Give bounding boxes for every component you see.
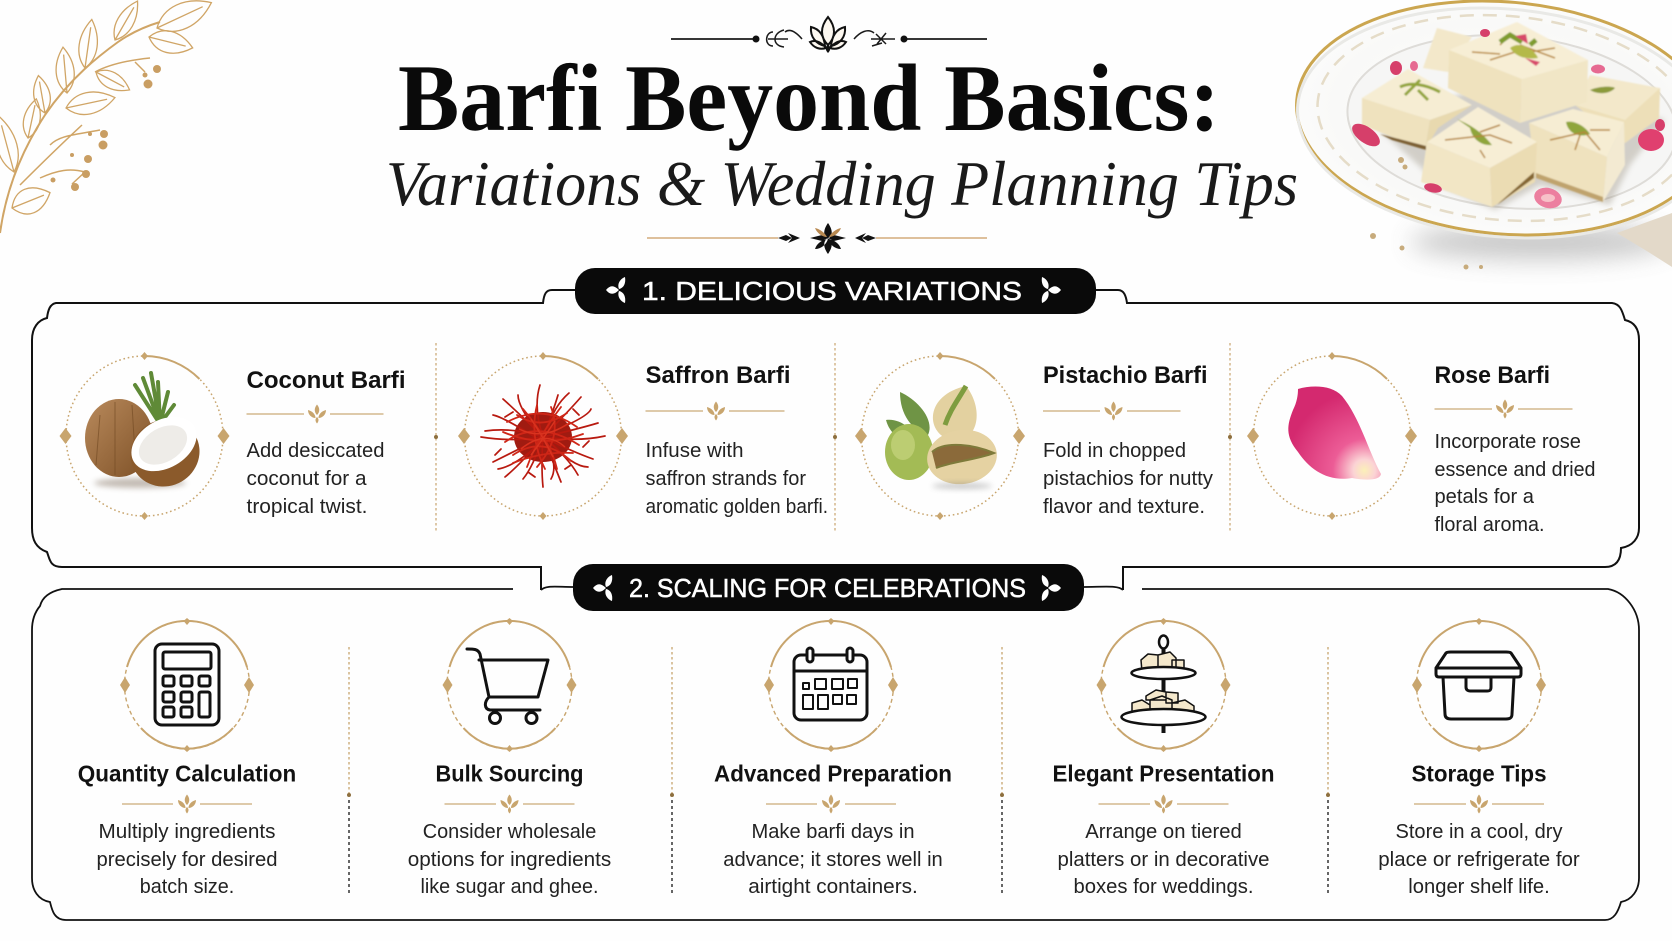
- description: like sugar and ghee.: [420, 875, 598, 898]
- description: [646, 439, 828, 518]
- napkin: [1617, 213, 1672, 267]
- lotus: [810, 17, 846, 49]
- divider: [1414, 794, 1544, 814]
- decorative gold botanical branch: [0, 0, 217, 233]
- divider: [766, 794, 896, 814]
- top title ornament: [671, 17, 987, 53]
- description: options for ingredients: [408, 848, 611, 871]
- description: platters or in decorative: [1058, 848, 1270, 871]
- item: storage tips: [1378, 618, 1580, 898]
- description: petals for a: [1434, 485, 1535, 508]
- icon: pistachios: [885, 386, 1000, 489]
- barfi pieces: [1362, 22, 1660, 207]
- heading: Bulk Sourcing: [436, 760, 584, 786]
- item: elegant presentation: [1052, 618, 1274, 898]
- description: saffron strands for: [646, 467, 806, 490]
- contact shadows: [1380, 90, 1665, 210]
- description: Store in a cool, dry: [1396, 820, 1563, 843]
- description: [1043, 439, 1214, 518]
- description: Multiply ingredients: [98, 820, 276, 843]
- left piece: [1362, 69, 1472, 120]
- heading: rose barfi: Rose Barfi: [1434, 362, 1550, 389]
- pill heading: 1. DELICIOUS VARIATIONS: [642, 278, 1022, 306]
- description: [96, 820, 278, 898]
- lower title ornament: [647, 223, 987, 254]
- rose petals: [1348, 29, 1665, 211]
- item: pistachio barfi: [855, 352, 1214, 520]
- description: [723, 820, 943, 898]
- description: Arrange on tiered: [1085, 820, 1242, 843]
- description: advance; it stores well in: [723, 848, 943, 871]
- icon: calculator: [155, 644, 219, 725]
- item: saffron barfi: [458, 352, 828, 520]
- description: coconut for a: [246, 467, 367, 490]
- icon: tiered platter: [1122, 636, 1206, 733]
- heading: Storage Tips: [1412, 760, 1546, 786]
- title: Barfi Beyond Basics:: [398, 45, 1220, 151]
- heading: pistachio barfi: Pistachio Barfi: [1043, 362, 1208, 389]
- description: floral aroma.: [1434, 513, 1544, 536]
- divider: [1434, 400, 1572, 418]
- back left piece: [1423, 28, 1472, 72]
- description: essence and dried: [1434, 458, 1596, 481]
- icon: saffron strands: [481, 385, 605, 487]
- heading: Advanced Preparation: [714, 760, 952, 786]
- pill heading: [541, 564, 1123, 611]
- crumbs: [1370, 157, 1483, 270]
- heading: Elegant Presentation: [1052, 760, 1274, 786]
- description: pistachios for nutty: [1043, 467, 1214, 490]
- divider: [246, 404, 384, 424]
- heading: coconut barfi: Coconut Barfi: [246, 367, 406, 394]
- item: coconut barfi: [60, 352, 406, 520]
- description: longer shelf life.: [1408, 875, 1550, 898]
- description: boxes for weddings.: [1074, 875, 1254, 898]
- pill heading: 2. SCALING FOR CELEBRATIONS: [629, 575, 1026, 603]
- divider: [122, 794, 252, 814]
- icon: coconut: [85, 373, 212, 499]
- plate of barfi image: [1287, 0, 1672, 270]
- description: Fold in chopped: [1043, 439, 1186, 462]
- centre piece: [1449, 22, 1588, 79]
- description: Make barfi days in: [752, 820, 914, 843]
- panel: scaling for celebrations: [32, 564, 1639, 920]
- divider: [1043, 402, 1180, 420]
- front left piece: [1427, 107, 1537, 168]
- item: advanced preparation: [714, 618, 952, 898]
- description: precisely for desired: [96, 848, 278, 871]
- pill heading: [575, 268, 1096, 314]
- description: [1058, 820, 1270, 898]
- description: Infuse with: [646, 439, 744, 462]
- item: bulk sourcing: [408, 618, 611, 898]
- panel: delicious variations: [32, 268, 1639, 590]
- plate well: [1340, 22, 1672, 222]
- back right piece: [1575, 75, 1660, 143]
- description: tropical twist.: [246, 495, 368, 518]
- icon: rose petal: [1288, 387, 1381, 480]
- description: place or refrigerate for: [1378, 848, 1580, 871]
- description: [246, 439, 384, 518]
- divider: [646, 402, 784, 420]
- description: batch size.: [140, 875, 234, 898]
- description: airtight containers.: [748, 875, 918, 898]
- description: Incorporate rose: [1434, 430, 1581, 453]
- plate rim: [1287, 0, 1672, 252]
- plate shadow: [1410, 224, 1670, 260]
- description: [1434, 430, 1596, 536]
- icon: shopping cart: [467, 649, 548, 724]
- centre garnish: [1472, 35, 1555, 60]
- panel outline: [32, 589, 1639, 920]
- icon: calendar: [794, 648, 867, 720]
- description: [408, 820, 611, 898]
- heading: Quantity Calculation: [78, 760, 296, 786]
- front right piece: [1529, 109, 1624, 157]
- divider: [444, 794, 574, 814]
- subtitle: Variations & Wedding Planning Tips: [386, 148, 1298, 219]
- description: Consider wholesale: [423, 820, 596, 843]
- heading: saffron barfi: Saffron Barfi: [646, 362, 790, 389]
- description: Add desiccated: [246, 439, 384, 462]
- panel outline: [32, 290, 1639, 590]
- description: [1378, 820, 1580, 898]
- item: quantity calculation: [78, 618, 296, 898]
- divider: [1098, 794, 1228, 814]
- description: aromatic golden barfi.: [646, 495, 828, 518]
- item: rose barfi: [1247, 352, 1596, 536]
- description: flavor and texture.: [1043, 495, 1205, 518]
- icon: storage container: [1436, 652, 1521, 719]
